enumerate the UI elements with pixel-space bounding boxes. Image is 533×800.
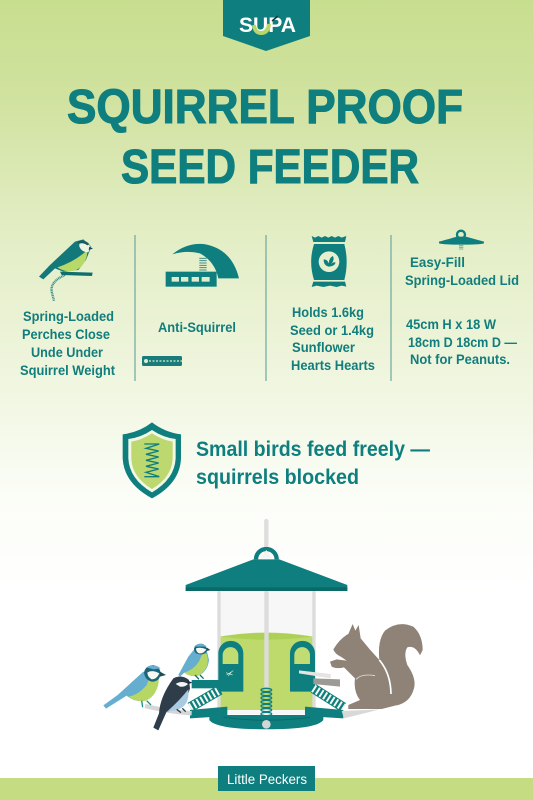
text: dimensions: [406, 316, 517, 367]
logo banner: SUPA: SUPA: [239, 14, 296, 37]
text: spring-loaded perches: Perches Close: [22, 326, 110, 342]
icon: seed bag: [311, 236, 347, 287]
left feeding port: [192, 641, 243, 692]
text: spring-loaded perches: Unde Under: [31, 344, 103, 360]
headline: small birds feed freely: Small birds feed freely —: [196, 438, 430, 461]
feeder illustration: [186, 521, 380, 729]
title: SEED FEEDER: [121, 141, 419, 194]
icon: blue tit on spring perch: [39, 239, 93, 301]
text: spring-loaded perches: [20, 308, 115, 378]
blue tit right: [178, 644, 210, 679]
text: capacity: Holds 1.6kg: [292, 304, 364, 320]
great tit: [153, 677, 192, 730]
text: capacity: Sunflower: [292, 339, 356, 355]
text: easy-fill lid: Spring-Loaded Lid: [405, 272, 519, 288]
badge: Little Peckers: Little Peckers: [227, 771, 307, 787]
text: spring-loaded perches: Squirrel Weight: [20, 362, 115, 378]
text: dimensions: Not for Peanuts.: [410, 351, 510, 367]
right feeding port: [290, 641, 340, 692]
icon: small ruler: [142, 356, 182, 366]
seed fill: [220, 632, 313, 710]
squirrel silhouette: [330, 624, 423, 709]
hanging rod and ring: [256, 521, 277, 559]
text: capacity: Seed or 1.4kg: [290, 322, 374, 338]
blue tit left: [103, 665, 166, 709]
logo banner: SUPA: [223, 0, 310, 51]
roof: [186, 559, 347, 591]
badge: Little Peckers: [218, 766, 315, 791]
text: capacity: [290, 304, 375, 373]
right grey perch: [342, 709, 380, 718]
grey perch: [145, 706, 192, 713]
column dividers: [135, 235, 391, 381]
side springs: [190, 688, 343, 707]
icon: feeder lid: [439, 231, 484, 249]
centre spring: [261, 688, 272, 716]
text: easy-fill lid: [405, 254, 519, 288]
headline: small birds feed freely: [196, 438, 430, 489]
text: easy-fill lid: Easy-Fill: [410, 254, 465, 270]
icon: shield with spring: [123, 422, 181, 498]
headline: small birds feed freely: squirrels blocked: [196, 466, 359, 489]
text: dimensions: 18cm D 18cm D —: [408, 334, 517, 350]
clear tube: [219, 591, 314, 714]
title: [67, 81, 463, 194]
tube poles: [217, 591, 316, 708]
text: dimensions: 45cm H x 18 W: [406, 316, 497, 332]
base and lower arms: [190, 707, 343, 729]
title: SQUIRREL PROOF: [67, 81, 463, 134]
icon: anti-squirrel baffle: [166, 244, 239, 287]
text: anti-squirrel: Anti-Squirrel: [158, 319, 236, 335]
text: spring-loaded perches: Spring-Loaded: [23, 308, 114, 324]
text: capacity: Hearts Hearts: [291, 357, 375, 373]
birds group: [103, 644, 210, 730]
